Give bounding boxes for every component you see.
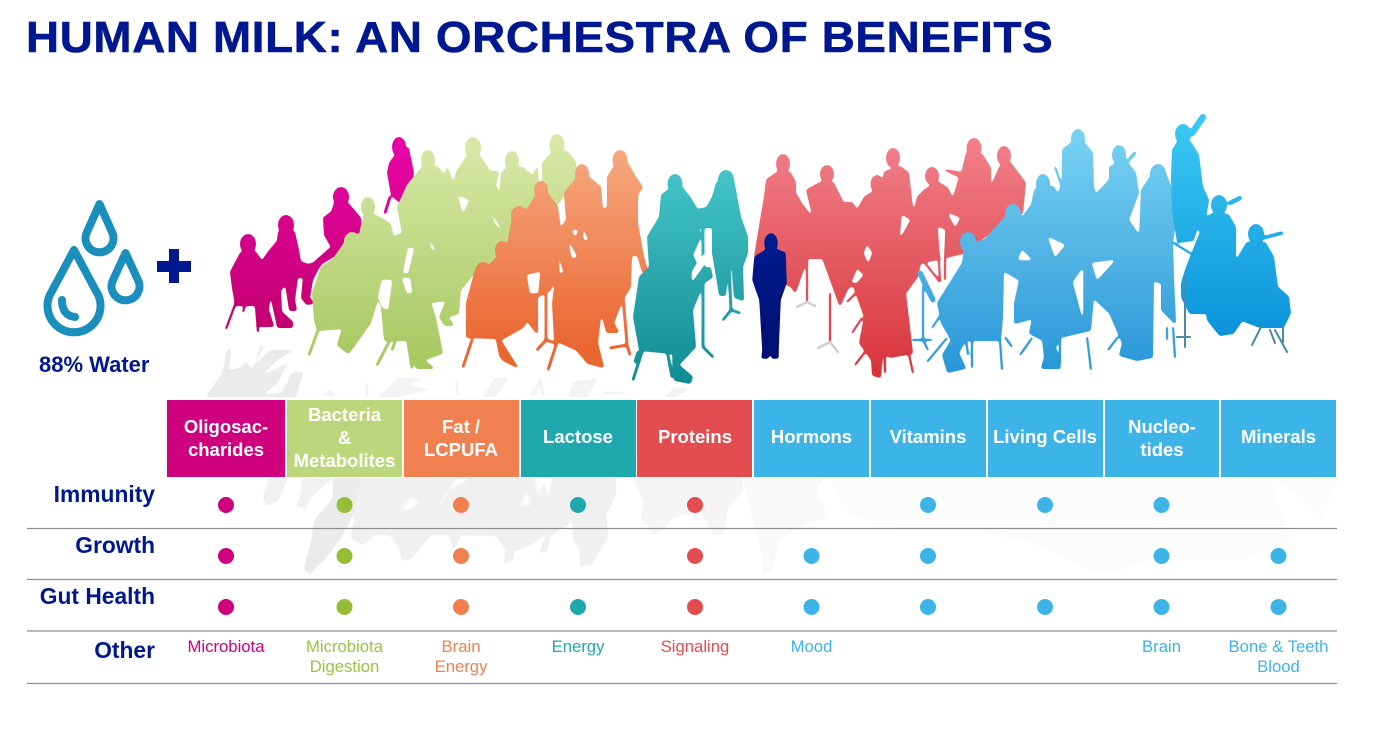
silhouettes: bacteria and metabolites (green) [309, 135, 577, 368]
row: immunity: Immunity [54, 481, 155, 507]
header: oligosaccharides [167, 400, 285, 477]
row: other: Other [94, 637, 155, 663]
header: lactose: Lactose [543, 426, 613, 447]
row: other: Bone & Teeth [1229, 637, 1328, 656]
reflection of the orchestra [206, 345, 1340, 576]
row: immunity [54, 481, 1170, 513]
cello legs and stand [1177, 277, 1287, 352]
row: gut health [40, 583, 1286, 615]
icon: water drops [48, 204, 140, 332]
silhouettes: bass and minerals (bright blue) [1172, 117, 1290, 335]
row: other: Digestion [310, 657, 379, 676]
header: proteins [637, 400, 752, 477]
header: hormones: Hormons [771, 426, 852, 447]
row: other [94, 637, 1328, 676]
row: other: Energy [552, 637, 605, 656]
gaps in green group [378, 196, 507, 310]
header: fat: LCPUFA [424, 439, 498, 460]
header: bacteria and metabolites: Bacteria [308, 404, 382, 425]
header: minerals: Minerals [1241, 426, 1316, 447]
header: proteins: Proteins [658, 426, 732, 447]
header: bacteria and metabolites: & [338, 427, 351, 448]
plus sign [157, 249, 191, 283]
header: oligosaccharides: charides [188, 439, 264, 460]
header: vitamins: Vitamins [890, 426, 966, 447]
header: hormones [754, 400, 869, 477]
header: bacteria and metabolites [287, 400, 402, 477]
header: vitamins [871, 400, 986, 477]
silhouettes: proteins (red) [755, 139, 1025, 377]
row: other: Brain [1142, 637, 1181, 656]
row: growth [75, 532, 1286, 564]
water label: 88% Water [39, 352, 150, 377]
silhouettes: oligosaccharides (magenta) [226, 138, 413, 332]
row: growth: Growth [75, 532, 155, 558]
row: other: Blood [1257, 657, 1300, 676]
gaps in blue group [1018, 237, 1115, 320]
header: nucleotides: tides [1140, 439, 1184, 460]
row: other: Microbiota [188, 637, 265, 656]
silhouette: conductor (navy) [753, 234, 786, 358]
silhouettes: lactose (teal) [633, 171, 747, 383]
row: other: Energy [435, 657, 488, 676]
category headers [167, 400, 1336, 477]
header: lactose [521, 400, 636, 477]
row: gut health: Gut Health [40, 583, 155, 609]
header: living cells: Living Cells [993, 426, 1097, 447]
header: bacteria and metabolites: Metabolites [294, 450, 395, 471]
header: minerals [1221, 400, 1336, 477]
row: other: Mood [791, 637, 832, 656]
row: other: Microbiota [306, 637, 384, 656]
title: HUMAN MILK: AN ORCHESTRA OF BENEFITS [26, 12, 1053, 62]
silhouettes: hormones, vitamins, living cells, nucleotides (light blue) [912, 130, 1177, 372]
header: living cells [988, 400, 1103, 477]
row dividers [27, 528, 1337, 684]
gap in teal group [692, 250, 711, 282]
header: fat [404, 400, 519, 477]
gaps in orange group [527, 228, 588, 293]
header: oligosaccharides: Oligosac- [184, 416, 268, 437]
row: other: Signaling [661, 637, 729, 656]
music stand bases [797, 302, 838, 352]
orchestra silhouettes [226, 117, 1290, 383]
header: nucleotides: Nucleo- [1128, 416, 1196, 437]
header: fat: Fat / [442, 416, 480, 437]
row: other: Brain [442, 637, 480, 656]
header: nucleotides [1105, 400, 1219, 477]
gaps in red group [864, 213, 960, 273]
silhouettes: fat (orange) [463, 151, 648, 370]
